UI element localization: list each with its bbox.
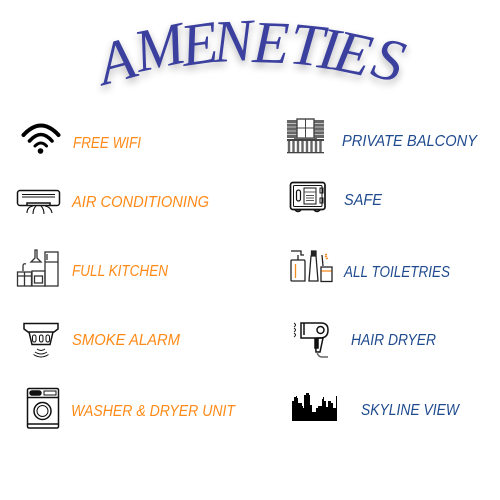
icon: skyline [292, 393, 337, 421]
title: N [210, 7, 258, 75]
icon: safe [290, 182, 325, 212]
label: free wifi: FREE WIFI [73, 135, 141, 152]
icon: air conditioner [18, 190, 60, 214]
title: A [86, 24, 143, 99]
title: T [287, 10, 330, 80]
icon: balcony [287, 119, 324, 153]
label: skyline view: SKYLINE VIEW [361, 402, 461, 419]
title: M [127, 9, 194, 85]
label: air conditioning: AIR CONDITIONING [71, 194, 209, 211]
icon: toiletries [291, 251, 332, 282]
label: washer and dryer: WASHER & DRYER UNIT [71, 403, 236, 420]
title: I [313, 14, 347, 83]
label: safe: SAFE [344, 192, 382, 209]
title [86, 7, 412, 99]
label: private balcony: PRIVATE BALCONY [342, 133, 478, 150]
title: E [327, 17, 378, 89]
icon: washer [28, 388, 58, 428]
icon: wifi [24, 126, 58, 154]
icon: hair dryer [294, 323, 328, 357]
label: all toiletries: ALL TOILETRIES [343, 264, 450, 281]
label: smoke alarm: SMOKE ALARM [72, 332, 181, 349]
icon: kitchen [18, 250, 58, 286]
title: E [251, 9, 290, 76]
title: E [176, 8, 222, 79]
icon: smoke alarm [24, 324, 58, 357]
label: full kitchen: FULL KITCHEN [72, 263, 168, 280]
title: S [366, 24, 412, 95]
label: hair dryer: HAIR DRYER [351, 332, 436, 349]
